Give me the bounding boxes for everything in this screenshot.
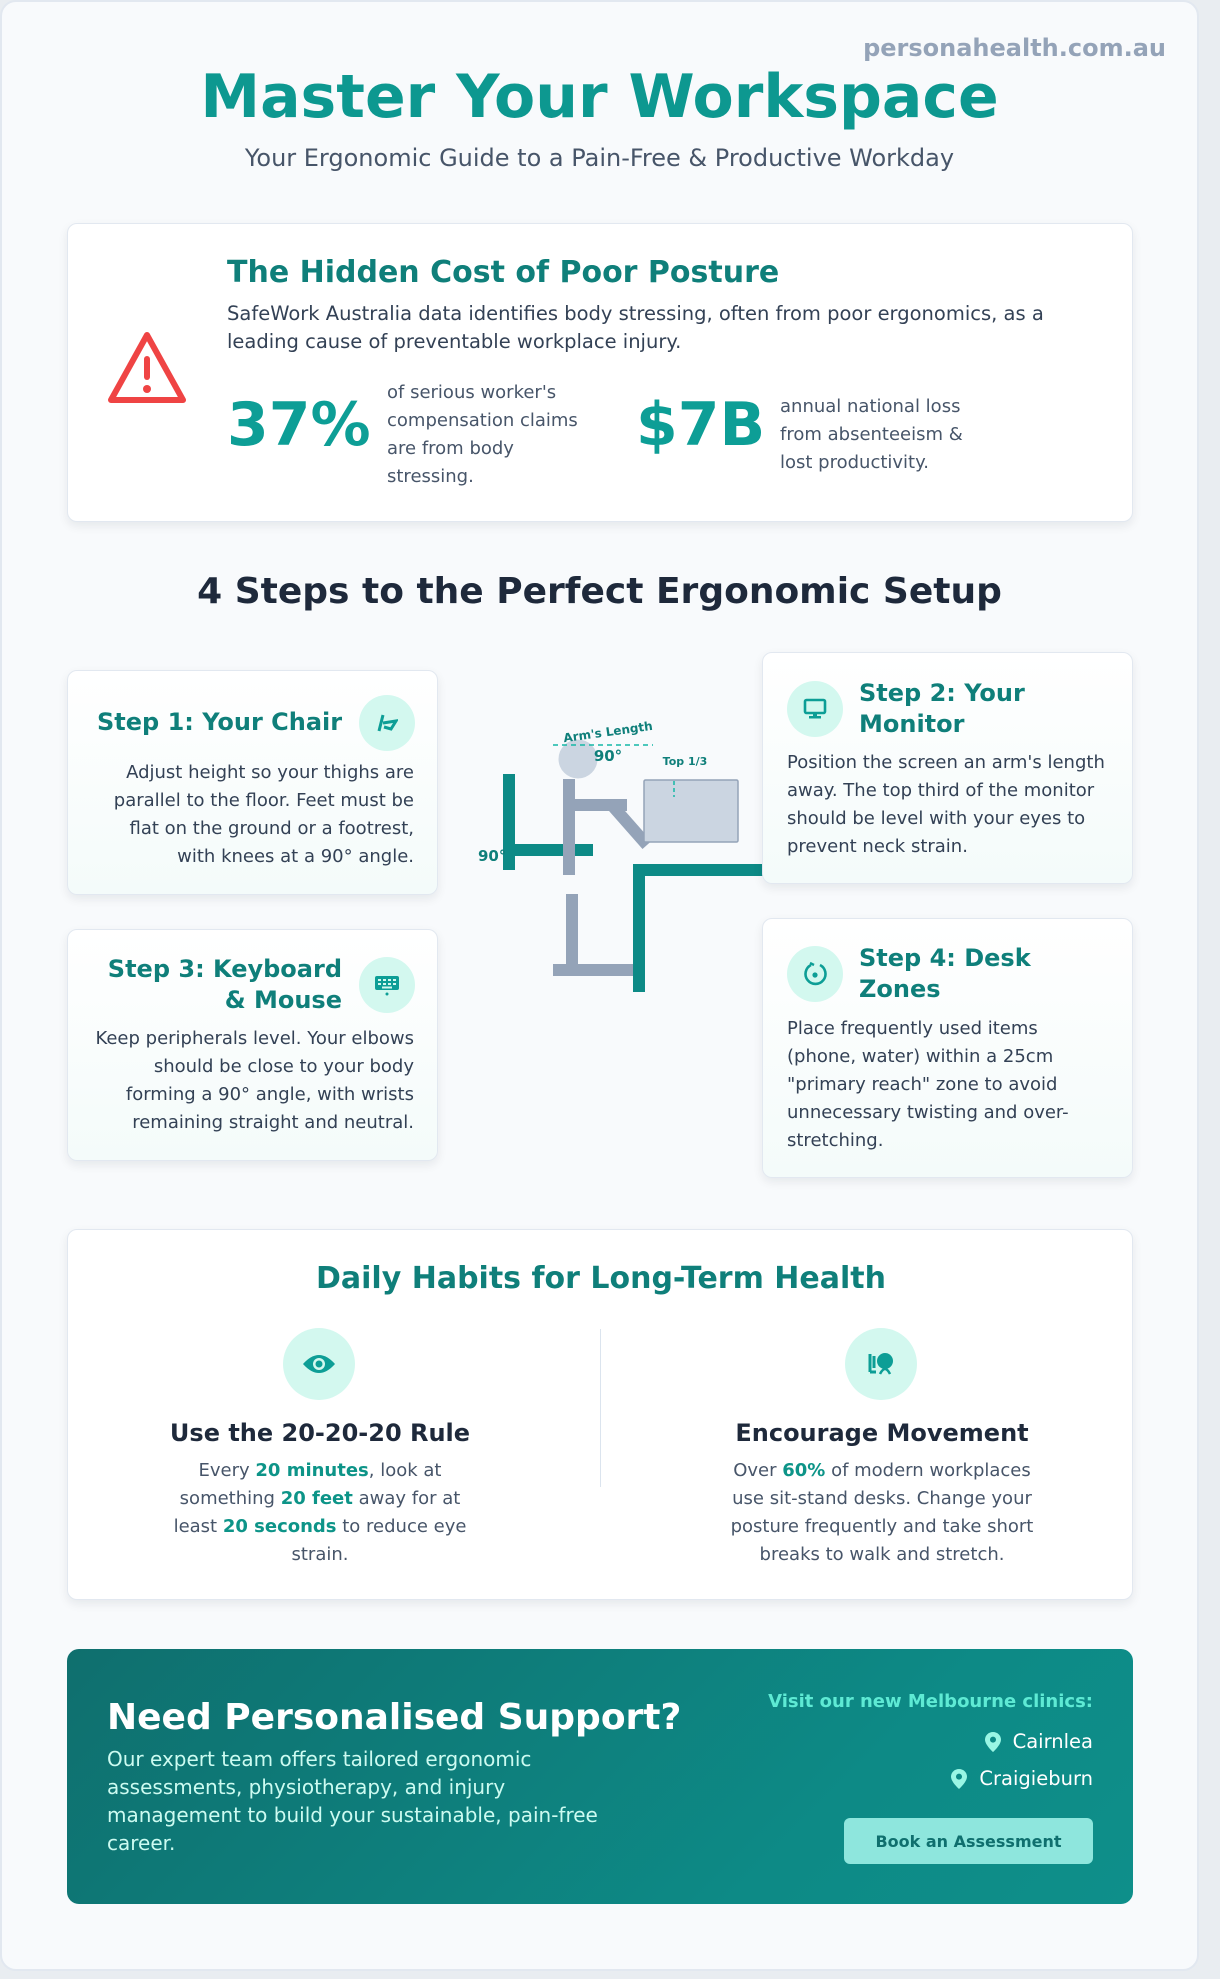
icon: keyboard [359, 957, 415, 1013]
heading: The Hidden Cost of Poor Posture [227, 255, 779, 290]
stat text 1: compensation claims [387, 410, 578, 431]
step 4 text: Place frequently used items [787, 1018, 1038, 1039]
stat text 2: lost productivity. [780, 452, 929, 473]
step 2 title: Monitor [859, 710, 964, 738]
step 2 text [787, 752, 1105, 857]
step 3 text [95, 1028, 414, 1133]
habit text: something 20 feet away for at [180, 1488, 460, 1509]
section heading: 4 Steps to the Perfect Ergonomic Setup [197, 571, 1002, 612]
panel: daily habits [67, 1229, 1133, 1600]
chair [503, 774, 593, 870]
desk [633, 864, 777, 992]
stat text 2: annual national loss [780, 396, 960, 417]
step 3 title [108, 955, 342, 1014]
button: Book an Assessment [875, 1832, 1062, 1850]
chart: ergonomic posture diagram [478, 719, 762, 992]
step 1 title: Step 1: Your Chair [97, 708, 342, 736]
cta text: Our expert team offers tailored ergonomic [107, 1747, 531, 1771]
icon: walking [845, 1328, 917, 1400]
step 4 title [859, 944, 1032, 1003]
step 1 text: parallel to the floor. Feet must be [114, 790, 414, 811]
habit text: breaks to walk and stretch. [760, 1544, 1004, 1565]
step 4 title: Step 4: Desk [859, 944, 1031, 972]
habit text: strain. [292, 1544, 348, 1565]
intro text: leading cause of preventable workplace injury. [227, 330, 681, 353]
clinics heading: Visit our new Melbourne clinics: [768, 1691, 1093, 1712]
habit title: Encourage Movement [735, 1419, 1029, 1447]
step 4 text: "primary reach" zone to avoid [787, 1074, 1057, 1095]
intro text [227, 302, 1044, 353]
icon: monitor [787, 681, 843, 737]
cta text [107, 1747, 598, 1855]
panel: step 2 [762, 652, 1133, 884]
chart: ergonomic posture diagram: 90° [478, 847, 506, 865]
cta text: career. [107, 1831, 175, 1855]
chart: ergonomic posture diagram: 90° [594, 747, 622, 765]
step 1 text: with knees at a 90° angle. [177, 846, 414, 867]
habit text: Every 20 minutes, look at [198, 1460, 441, 1481]
website url: personahealth.com.au [863, 34, 1166, 62]
step 2 text: prevent neck strain. [787, 836, 968, 857]
stat: $7B: $7B [636, 390, 765, 460]
panel: step 4 [762, 918, 1133, 1178]
habit text: posture frequently and take short [731, 1516, 1033, 1537]
habit text: use sit-stand desks. Change your [732, 1488, 1032, 1509]
intro text: SafeWork Australia data identifies body stressing, often from poor ergonomics, as a [227, 302, 1044, 325]
labels [553, 744, 653, 746]
step 1 text [114, 762, 414, 867]
icon: chair [359, 695, 415, 751]
habit text [731, 1460, 1033, 1565]
monitor [644, 780, 738, 842]
subtitle: Your Ergonomic Guide to a Pain-Free & Productive Workday [245, 144, 954, 172]
habit title: Use the 20-20-20 Rule [170, 1419, 470, 1447]
step 1 text: Adjust height so your thighs are [126, 762, 414, 783]
cta text: management to build your sustainable, pain-free [107, 1803, 598, 1827]
stat text 1 [387, 382, 578, 487]
step 2 title [859, 679, 1025, 738]
clinic: Cairnlea: Cairnlea [1013, 1730, 1093, 1753]
habit text [174, 1460, 466, 1565]
icon: eye [283, 1328, 355, 1400]
step 3 text: forming a 90° angle, with wrists [126, 1084, 414, 1105]
step 1 text: flat on the ground or a footrest, [129, 818, 414, 839]
cta text: assessments, physiotherapy, and injury [107, 1775, 505, 1799]
stat text 1: of serious worker's [387, 382, 556, 403]
step 4 text: unnecessary twisting and over- [787, 1102, 1069, 1123]
step 3 text: Keep peripherals level. Your elbows [95, 1028, 414, 1049]
chart: ergonomic posture diagram: Arm's Length [563, 719, 653, 745]
stat text 1: are from body [387, 438, 514, 459]
divider [600, 1329, 601, 1487]
person [553, 740, 647, 976]
panel: hidden cost [67, 223, 1133, 522]
cta heading: Need Personalised Support? [107, 1697, 681, 1738]
step 2 text: Position the screen an arm's length [787, 752, 1105, 773]
stat: 37%: 37% [227, 390, 371, 460]
step 4 text [787, 1018, 1069, 1151]
habits heading: Daily Habits for Long-Term Health [316, 1261, 886, 1296]
step 3 text: should be close to your body [154, 1056, 414, 1077]
panel: call to action [67, 1649, 1133, 1904]
step 4 text: stretching. [787, 1130, 883, 1151]
panel: step 1 [67, 670, 438, 895]
stat text 1: stressing. [387, 466, 474, 487]
icon: target [787, 946, 843, 1002]
panel: step 3 [67, 929, 438, 1161]
step 3 title: Step 3: Keyboard [108, 955, 342, 983]
step 4 title: Zones [859, 975, 941, 1003]
habit: movement [731, 1328, 1033, 1565]
step 4 text: (phone, water) within a 25cm [787, 1046, 1053, 1067]
habit text: least 20 seconds to reduce eye [174, 1516, 466, 1537]
title: Master Your Workspace [200, 62, 999, 132]
stat text 2: from absenteeism & [780, 424, 963, 445]
chart: ergonomic posture diagram: Top 1/3 [663, 755, 707, 768]
step 3 title: & Mouse [225, 986, 342, 1014]
step 2 text: away. The top third of the monitor [787, 780, 1094, 801]
step 2 title: Step 2: Your [859, 679, 1025, 707]
clinic: Craigieburn: Craigieburn [979, 1767, 1093, 1790]
habit: 20-20-20 [170, 1328, 470, 1565]
stat text 2 [780, 396, 963, 473]
step 3 text: remaining straight and neutral. [132, 1112, 414, 1133]
button [844, 1818, 1093, 1864]
habit text: Over 60% of modern workplaces [733, 1460, 1031, 1481]
step 2 text: should be level with your eyes to [787, 808, 1085, 829]
icon: warning [108, 332, 186, 403]
